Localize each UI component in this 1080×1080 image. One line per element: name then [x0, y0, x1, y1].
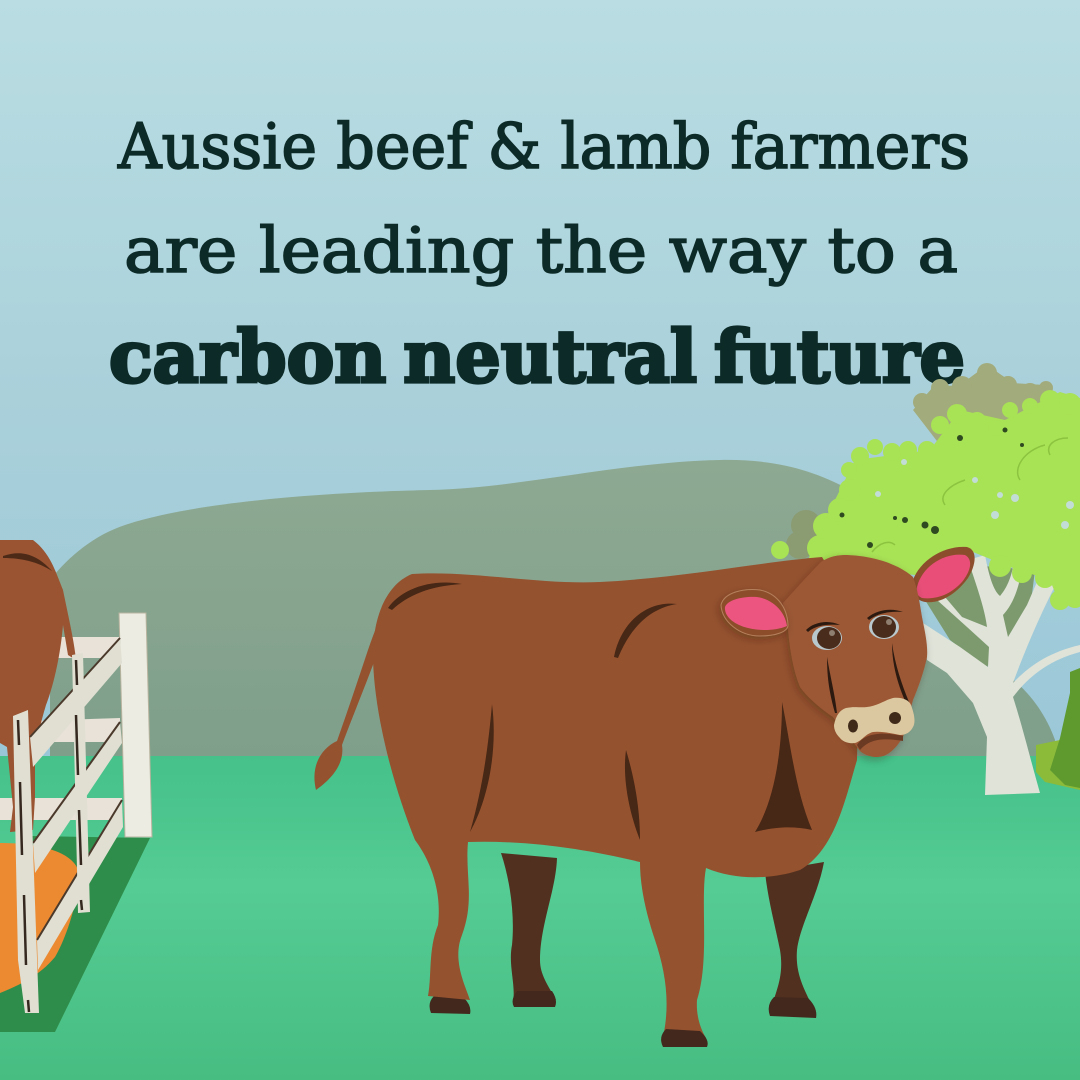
body cut lines — [388, 582, 812, 840]
bush at right edge — [1036, 668, 1080, 790]
fence diagonal rails — [30, 638, 123, 970]
fence front posts — [13, 653, 90, 1013]
rear cow crease — [3, 553, 52, 571]
tree back foliage olive — [913, 363, 1055, 445]
paddock green base — [0, 836, 150, 1032]
main cow — [314, 547, 975, 1047]
foliage shadow lines — [872, 438, 1068, 552]
cow near ear — [721, 590, 788, 636]
fence back post — [119, 613, 152, 837]
tree foliage lime — [807, 390, 1080, 610]
rear cow at left — [0, 540, 76, 832]
green grass ground — [0, 756, 1080, 1080]
nostrils — [848, 720, 858, 732]
cow hoof front — [661, 1029, 708, 1047]
right eye white — [869, 615, 899, 639]
near ear outer — [721, 590, 788, 636]
fence back rails — [0, 637, 122, 820]
background sky — [0, 0, 1080, 760]
cow head — [783, 555, 927, 757]
white fence front — [13, 638, 123, 1013]
title line 2: are leading the way to a — [124, 214, 958, 287]
far ear outer — [912, 547, 975, 602]
near ear pink — [725, 597, 787, 630]
dark area between the branches — [925, 565, 1035, 668]
dark back foliage — [786, 510, 821, 559]
cow body — [373, 557, 860, 1038]
cow far back leg — [765, 862, 824, 1015]
cow far ear — [912, 547, 975, 602]
foliage sky holes — [875, 459, 1074, 529]
eye highlight right — [886, 619, 892, 625]
orange paper patch — [0, 843, 78, 993]
mouth line — [857, 734, 903, 750]
cow far front leg — [501, 853, 557, 1002]
tree trunk — [923, 555, 1080, 795]
far ear pink — [917, 555, 970, 598]
muzzle — [834, 698, 914, 743]
title line 1: Aussie beef & lamb farmers — [117, 110, 970, 183]
rear cow body — [0, 540, 76, 832]
darker bush — [1050, 668, 1080, 788]
fence rail edges — [30, 638, 122, 940]
tree — [771, 363, 1080, 795]
brows — [806, 610, 903, 632]
nose creases — [827, 643, 909, 713]
left eye white — [812, 626, 842, 650]
right eye pupil — [872, 616, 896, 638]
background hill — [50, 460, 1056, 757]
fence post slits — [18, 660, 82, 1012]
foliage gaps — [840, 428, 1024, 548]
right nostril — [889, 712, 901, 724]
hooves back — [430, 991, 816, 1018]
left eye pupil — [817, 627, 841, 649]
cow face details — [806, 610, 914, 750]
cow tail — [314, 575, 410, 790]
title line 3 bold: carbon neutral future — [109, 314, 965, 399]
title — [109, 110, 970, 399]
lighter bush — [1036, 740, 1080, 790]
small lime foliage behind cow — [771, 541, 789, 559]
white fence back — [0, 613, 152, 837]
eye highlights — [829, 630, 835, 636]
